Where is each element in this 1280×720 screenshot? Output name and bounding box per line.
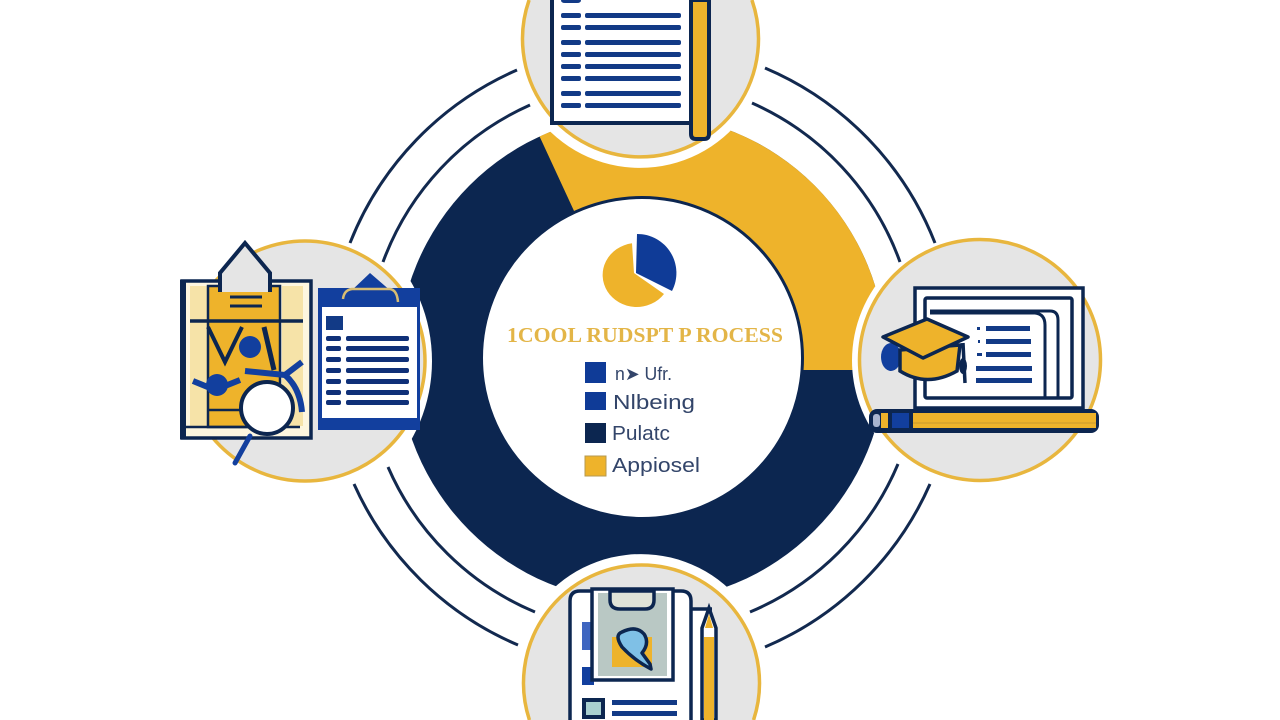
- legend: n➤ Ufr.: [615, 364, 672, 384]
- bottom circle: document and pencil icon: [524, 565, 760, 720]
- left circle: bag and clipboard icon: [180, 241, 425, 481]
- donut ring chart: [112, 0, 1112, 720]
- legend: Appiosel: [612, 455, 700, 477]
- center white circle: [482, 198, 802, 518]
- legend: [585, 362, 700, 477]
- center title: 1COOL RUDSPT P ROCESS: [507, 323, 783, 347]
- right circle: laptop and graduation cap icon: [860, 240, 1100, 480]
- legend: Pulatc: [612, 423, 670, 445]
- legend: Nlbeing: [613, 392, 695, 414]
- concentric thin arcs: [350, 68, 935, 647]
- center pie icon: [603, 234, 676, 307]
- top circle: document icon: [522, 0, 759, 157]
